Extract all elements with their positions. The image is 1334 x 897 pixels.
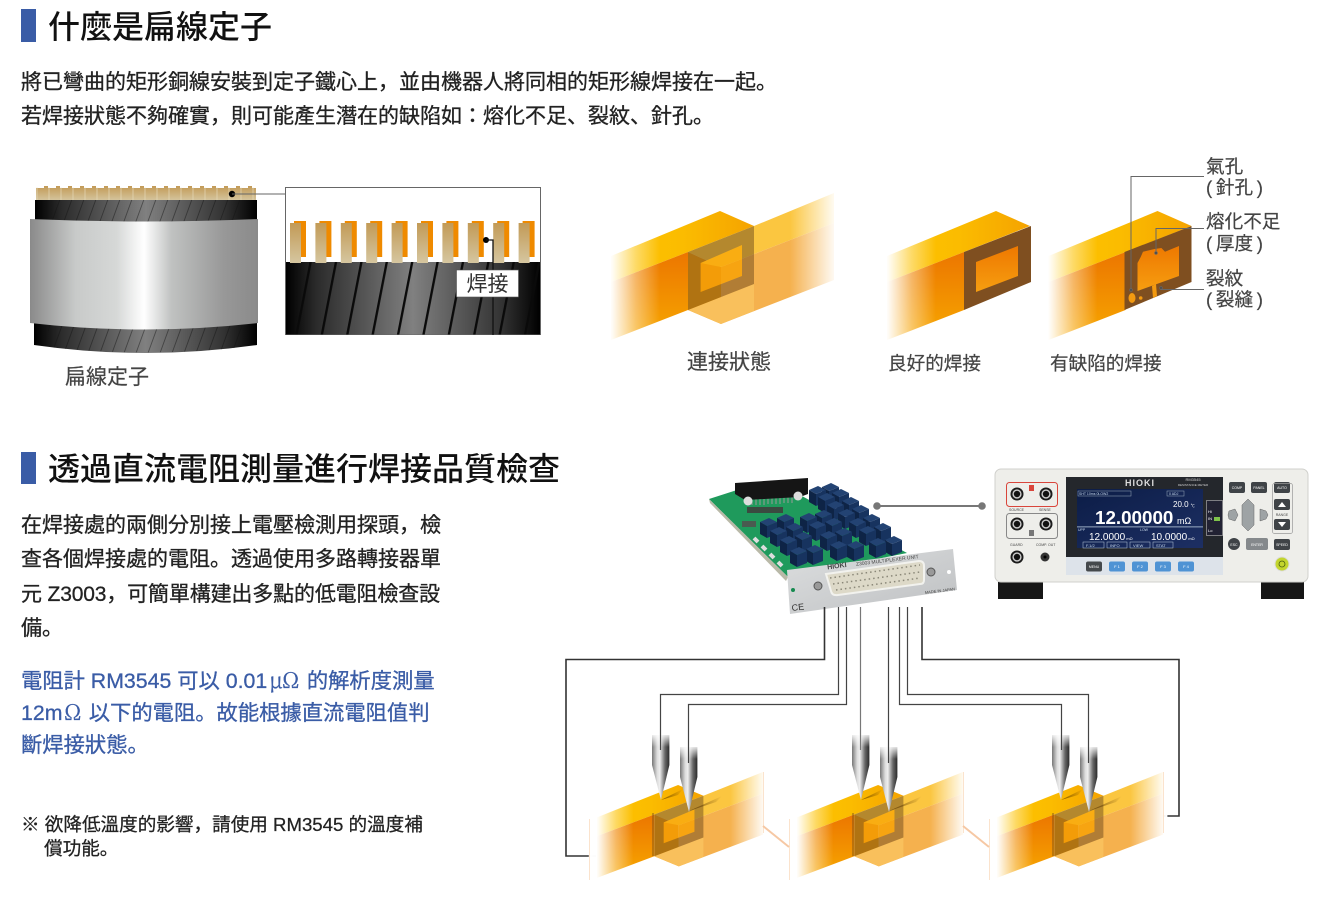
body text (21, 514, 441, 640)
icon: good weld block (876, 205, 1031, 345)
title: DC resistance weld inspection: 透過直流電阻測量進行焊接品質檢查 (48, 451, 560, 487)
icon: defective weld block (1038, 205, 1192, 345)
caption: defective weld: 有缺陷的焊接 (1050, 353, 1162, 374)
icon: Z3003 multiplexer unit (709, 478, 957, 614)
body text: 元 Z3003，可簡單構建出多點的低電阻檢查設 (21, 583, 440, 606)
label: crack: 裂紋 (1206, 268, 1243, 289)
icon: RM3545 resistance meter: COMP. OUT (1036, 543, 1056, 547)
icon: RM3545 resistance meter: F 3 (1160, 564, 1167, 569)
label: crack (1206, 268, 1263, 310)
icon: RM3545 resistance meter: F 2 (1137, 564, 1144, 569)
icon: RM3545 resistance meter: Lo (1208, 528, 1213, 533)
icon: RM3545 resistance meter: F.1/2 (1086, 543, 1095, 548)
body text: 在焊接處的兩側分別接上電壓檢測用探頭，檢 (21, 514, 441, 537)
icon: RM3545 resistance meter: SOURCE (1009, 508, 1025, 512)
icon: RM3545 resistance meter: SENSE (1039, 508, 1052, 512)
icon: RM3545 resistance meter: 20.0 ℃ (1173, 500, 1195, 509)
icon: RM3545 resistance meter: LOW (1140, 528, 1149, 532)
icon: RM3545 resistance meter: IN (1208, 516, 1212, 521)
callout connector line (232, 193, 285, 195)
caption: flat-wire stator: 扁線定子 (65, 366, 149, 389)
icon: RM3545 resistance meter: HIOKI (1125, 478, 1155, 488)
icon: Z3003 multiplexer unit: MADE IN JAPAN (925, 586, 955, 595)
blue highlight text: 12mΩ 以下的電阻。故能根據直流電阻值判 (21, 696, 430, 727)
label: gas hole (1206, 156, 1263, 198)
icon: RM3545 resistance meter: GUARD (1010, 543, 1023, 547)
icon: RM3545 resistance meter: 12.0000 mΩ (1089, 532, 1133, 543)
icon: Z3003 multiplexer unit: Z3003 MULTIPLEXER UNIT (856, 554, 919, 568)
label: lack of fusion: 熔化不足 (1206, 211, 1280, 232)
label: crack: ( 裂縫 ) (1206, 289, 1263, 310)
heading bar 1 (21, 9, 36, 42)
connector between module and meter (873, 502, 986, 510)
footnote (21, 814, 423, 859)
body text: 備。 (21, 617, 63, 640)
label: gas hole: 氣孔 (1206, 156, 1243, 177)
title: what is a flat-wire stator: 什麼是扁線定子 (48, 9, 272, 45)
icon: RM3545 resistance meter: PANEL (1253, 486, 1265, 490)
icon: RM3545 resistance meter: RESISTANCE METER (1178, 483, 1209, 487)
icon: RM3545 resistance meter: ESC (1230, 543, 1238, 547)
icon: RM3545 resistance meter: F 4 (1183, 564, 1190, 569)
icon: Z3003 multiplexer unit: HIOKI (827, 562, 847, 571)
label: weld (456, 270, 518, 297)
body text: 查各個焊接處的電阻。透過使用多路轉接器單 (21, 548, 441, 571)
icon: RM3545 resistance meter: VIEW (1133, 543, 1143, 548)
outer wiring loop (566, 607, 1179, 856)
icon: RM3545 resistance meter: UPP (1078, 528, 1086, 532)
caption: good weld: 良好的焊接 (888, 353, 981, 374)
icon: RM3545 resistance meter: F 1 (1114, 564, 1121, 569)
icon: RM3545 resistance meter: ENTER (1251, 543, 1263, 547)
heading bar 2 (21, 452, 36, 484)
icon: RM3545 resistance meter: AUTO (1277, 486, 1287, 490)
icon: RM3545 resistance meter: MENU (1089, 565, 1100, 569)
icon: stator illustration (30, 186, 258, 353)
icon: RM3545 resistance meter (995, 469, 1308, 599)
label: lack of fusion (1206, 211, 1280, 254)
icon: RM3545 resistance meter: Hi (1208, 509, 1212, 514)
intro text (21, 70, 777, 128)
caption: connection state: 連接狀態 (687, 351, 771, 374)
blue highlight text: 斷焊接狀態。 (21, 733, 149, 757)
callout lines for defects (1130, 176, 1204, 291)
welded blocks under probes (589, 768, 1167, 881)
panel: stator weld close-up (286, 188, 540, 335)
label: weld: 焊接 (466, 273, 508, 296)
icon: Z3003 multiplexer unit: CE (791, 602, 805, 613)
icon: RM3545 resistance meter: RANGE (1276, 513, 1289, 517)
blue highlight text: 電阻計 RM3545 可以 0.01μΩ 的解析度測量 (21, 664, 435, 695)
icon: RM3545 resistance meter: RM3545 (1185, 477, 1201, 482)
intro text: 若焊接狀態不夠確實，則可能產生潛在的缺陷如：熔化不足、裂紋、針孔。 (21, 105, 714, 128)
icon: RM3545 resistance meter: STAT (1156, 543, 1166, 548)
icon: RM3545 resistance meter: mΩ (1177, 516, 1191, 526)
icon: RM3545 resistance meter: COMP (1232, 486, 1243, 490)
intro text: 將已彎曲的矩形銅線安裝到定子鐵心上，並由機器人將同相的矩形線焊接在一起。 (21, 71, 777, 94)
label: lack of fusion: ( 厚度 ) (1206, 233, 1263, 254)
icon: RM3545 resistance meter: SPEED (1276, 543, 1288, 547)
probes and inner wiring (650, 607, 1122, 812)
icon: RM3545 resistance meter: 10.0000 mΩ (1151, 532, 1195, 543)
footnote: ※ 欲降低溫度的影響，請使用 RM3545 的溫度補 (21, 814, 423, 835)
blue highlight text (21, 664, 435, 757)
icon: RM3545 resistance meter: 0 ADJ (1169, 492, 1179, 496)
icon: connection state block (600, 188, 840, 345)
icon: RM3545 resistance meter: INFO (1110, 543, 1120, 548)
icon: RM3545 resistance meter: 12.00000 (1095, 507, 1173, 528)
label: gas hole: ( 針孔 ) (1206, 176, 1263, 198)
footnote: 償功能。 (44, 838, 118, 859)
icon: RM3545 resistance meter: SHT 10ms 0LOW2 (1079, 492, 1108, 496)
